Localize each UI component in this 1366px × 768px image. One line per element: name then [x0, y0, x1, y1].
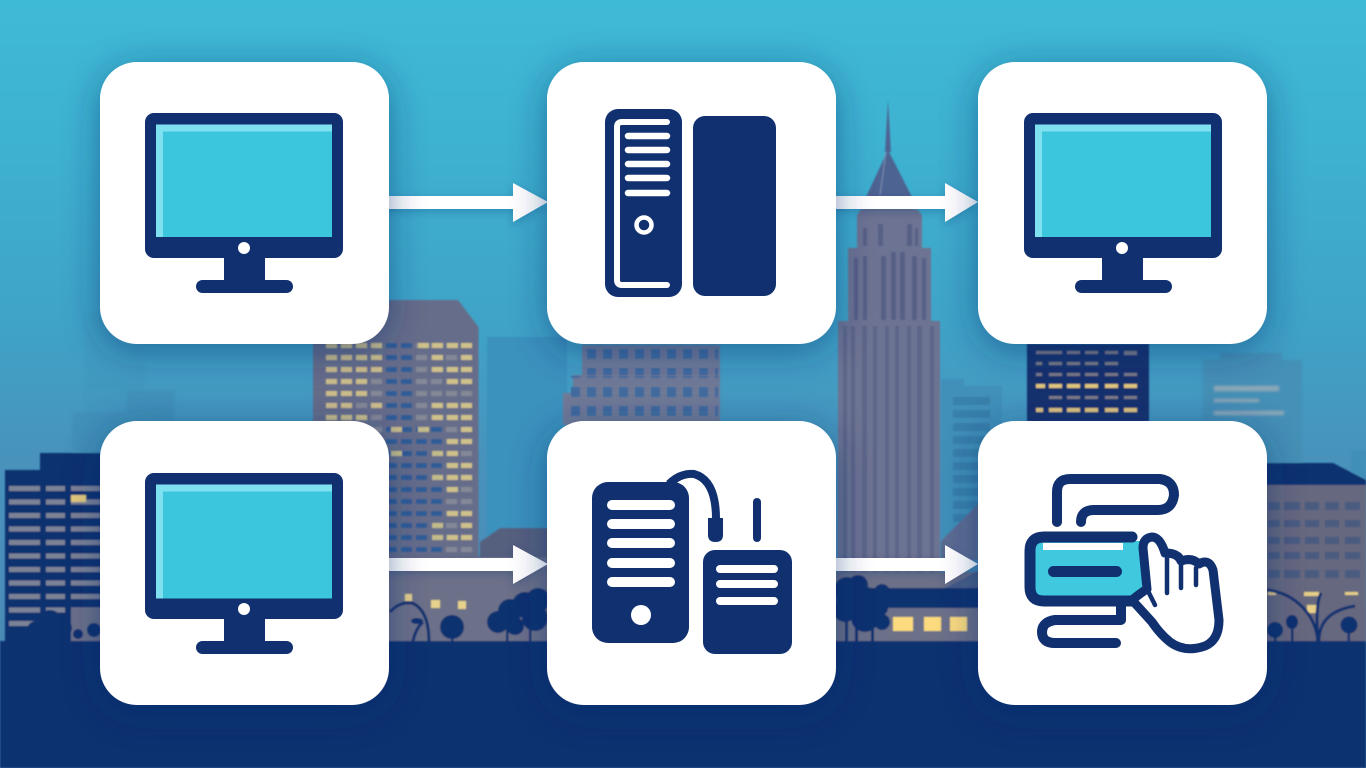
trees and street lamps [27, 575, 1358, 642]
arrow: bottom row step 4 to step 5 [385, 545, 548, 584]
panel: monitor top left [100, 62, 389, 344]
lit windows of low grey building [405, 594, 466, 609]
navy ground strip [0, 641, 1366, 768]
centre grey stepped building [563, 345, 720, 425]
roof behind lower arrow [480, 528, 560, 570]
arrow: top row step 1 to step 2 [385, 183, 548, 222]
hazy far right building [1203, 353, 1366, 480]
right grey building [1262, 463, 1366, 643]
roof triangle right of skyscraper [941, 504, 978, 560]
panel: connected servers bottom middle [547, 421, 836, 705]
low grey building between lower left cards [386, 557, 551, 643]
icon: tower server and panel [605, 109, 776, 297]
skyscraper with spire [838, 100, 940, 591]
hazy far left buildings [73, 312, 174, 473]
panel: monitor bottom left [100, 421, 389, 705]
teal building beside grey tower A [487, 337, 567, 542]
icon: server connected to device [592, 474, 792, 654]
left navy building [5, 453, 105, 645]
icon: desktop monitor [145, 473, 343, 654]
panel: tower computer top middle [547, 62, 836, 344]
icon: hand holding card [1030, 479, 1219, 649]
icon: desktop monitor [145, 113, 343, 293]
icon: desktop monitor [1024, 113, 1222, 293]
dark navy building with windows [1027, 344, 1149, 422]
arrow: bottom row step 5 to step 6 [832, 545, 978, 584]
teal building beside skyscraper [941, 379, 1002, 545]
panel: card and hand bottom right [978, 421, 1267, 705]
grey office building with lit windows [313, 300, 478, 558]
low navy-roofed building right of skyscraper [836, 570, 981, 642]
arrow: top row step 2 to step 3 [832, 183, 978, 222]
panel: monitor top right [978, 62, 1267, 344]
